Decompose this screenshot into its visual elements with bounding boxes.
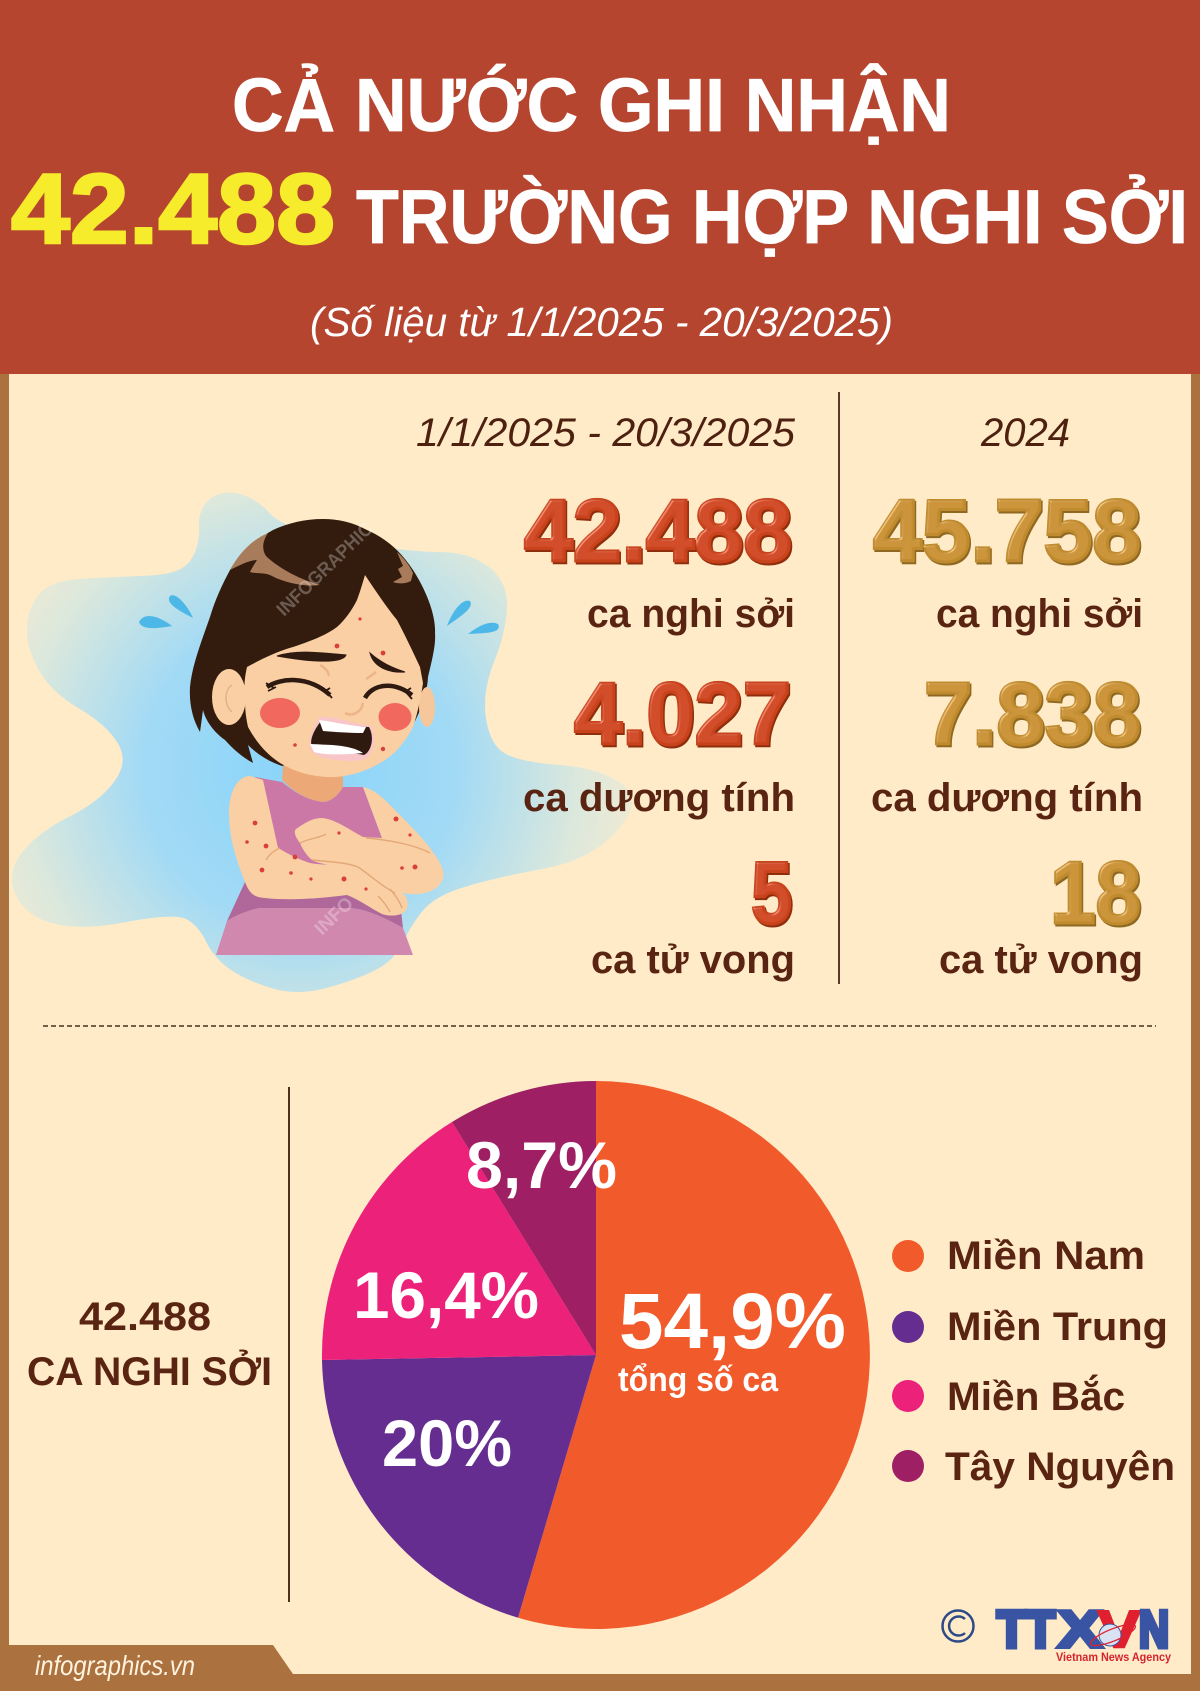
pie chart: share of cases by region [322, 1081, 870, 1629]
positive value: 4.027 [574, 664, 791, 763]
face [244, 575, 423, 777]
column: 1/1/2025 - 20/3/2025 [416, 411, 796, 982]
total cases label [27, 1295, 272, 1394]
suspected label: ca nghi sởi [587, 592, 795, 636]
value 16,4%: 16,4% [353, 1258, 539, 1332]
suspected value: 42.488 [524, 481, 792, 580]
year heading: 2024 [980, 411, 1070, 455]
deaths label: ca tử vong [591, 938, 795, 982]
slice: Tây Nguyên 8,7% [452, 1081, 596, 1355]
neck [282, 765, 343, 802]
deaths label: ca tử vong [939, 938, 1143, 982]
logo: TTXVN: TT [997, 1601, 1055, 1659]
column: 2024 [871, 411, 1143, 982]
right arm [295, 787, 443, 894]
deaths value: 18 [1050, 843, 1141, 942]
blue blob backdrop [12, 493, 632, 992]
deaths value: 5 [751, 843, 792, 942]
cheeks [260, 698, 412, 731]
logo: TTXVN: Vietnam News Agency [1056, 1650, 1171, 1664]
slice: Miền Nam 54,9% [518, 1081, 870, 1629]
positive label: ca dương tính [871, 776, 1143, 820]
suspected value: 45.758 [873, 481, 1141, 580]
caption tổng số ca: tổng số ca [618, 1361, 779, 1399]
hair [190, 519, 435, 766]
legend item: Miền Nam: Miền Nam [947, 1234, 1145, 1278]
hair highlights [230, 533, 413, 586]
suspected label: ca nghi sởi [936, 592, 1143, 636]
illustration: sick girl with measles: INFOGRAPHIC [273, 518, 378, 621]
legend item: Tây Nguyên: Tây Nguyên [945, 1445, 1175, 1489]
illustration: sick girl with measles: INFO [311, 893, 358, 940]
eyebrows and closed eyes [266, 652, 412, 699]
tear drops [139, 595, 499, 634]
dress top [245, 777, 395, 890]
logo: TTXVN: V [1098, 1601, 1140, 1659]
frown and nose marks [320, 665, 376, 714]
arm creases [266, 834, 430, 912]
total cases label: CA NGHI SỞI [27, 1348, 272, 1394]
source: infographics.vn: infographics.vn [35, 1650, 195, 1681]
value 54,9%: 54,9% [619, 1276, 846, 1365]
slice: Miền Bắc 16,4% [322, 1122, 596, 1360]
value 20%: 20% [382, 1406, 512, 1480]
logo: TTXVN: N [1139, 1601, 1169, 1659]
illustration: sick girl with measles [12, 493, 632, 992]
icon: copyright [942, 1610, 974, 1642]
date heading: 1/1/2025 - 20/3/2025 [416, 411, 796, 455]
logo: TTXVN [997, 1601, 1171, 1664]
left arm [229, 776, 408, 916]
legend item: Miền Trung: Miền Trung [947, 1305, 1168, 1349]
title line 1: CẢ NƯỚC GHI NHẬN [232, 63, 951, 147]
cream content panel [9, 374, 1191, 1674]
value 8,7%: 8,7% [466, 1128, 617, 1202]
dress shadow band [227, 882, 403, 928]
positive value: 7.838 [924, 664, 1141, 763]
header banner [0, 0, 1200, 374]
subtitle: (Số liệu từ 1/1/2025 - 20/3/2025) [310, 299, 893, 345]
legend [892, 1234, 1175, 1489]
skirt [216, 908, 413, 955]
ears [212, 669, 435, 727]
legend item: Miền Bắc: Miền Bắc [947, 1373, 1125, 1419]
logo: TTXVN: X [1058, 1601, 1102, 1659]
measles spots [245, 617, 418, 891]
slice: Miền Trung 20% [322, 1355, 596, 1618]
positive label: ca dương tính [523, 776, 795, 820]
total cases label: 42.488 [79, 1295, 211, 1339]
mouth [310, 717, 374, 761]
title number: 42.488 [11, 153, 335, 264]
